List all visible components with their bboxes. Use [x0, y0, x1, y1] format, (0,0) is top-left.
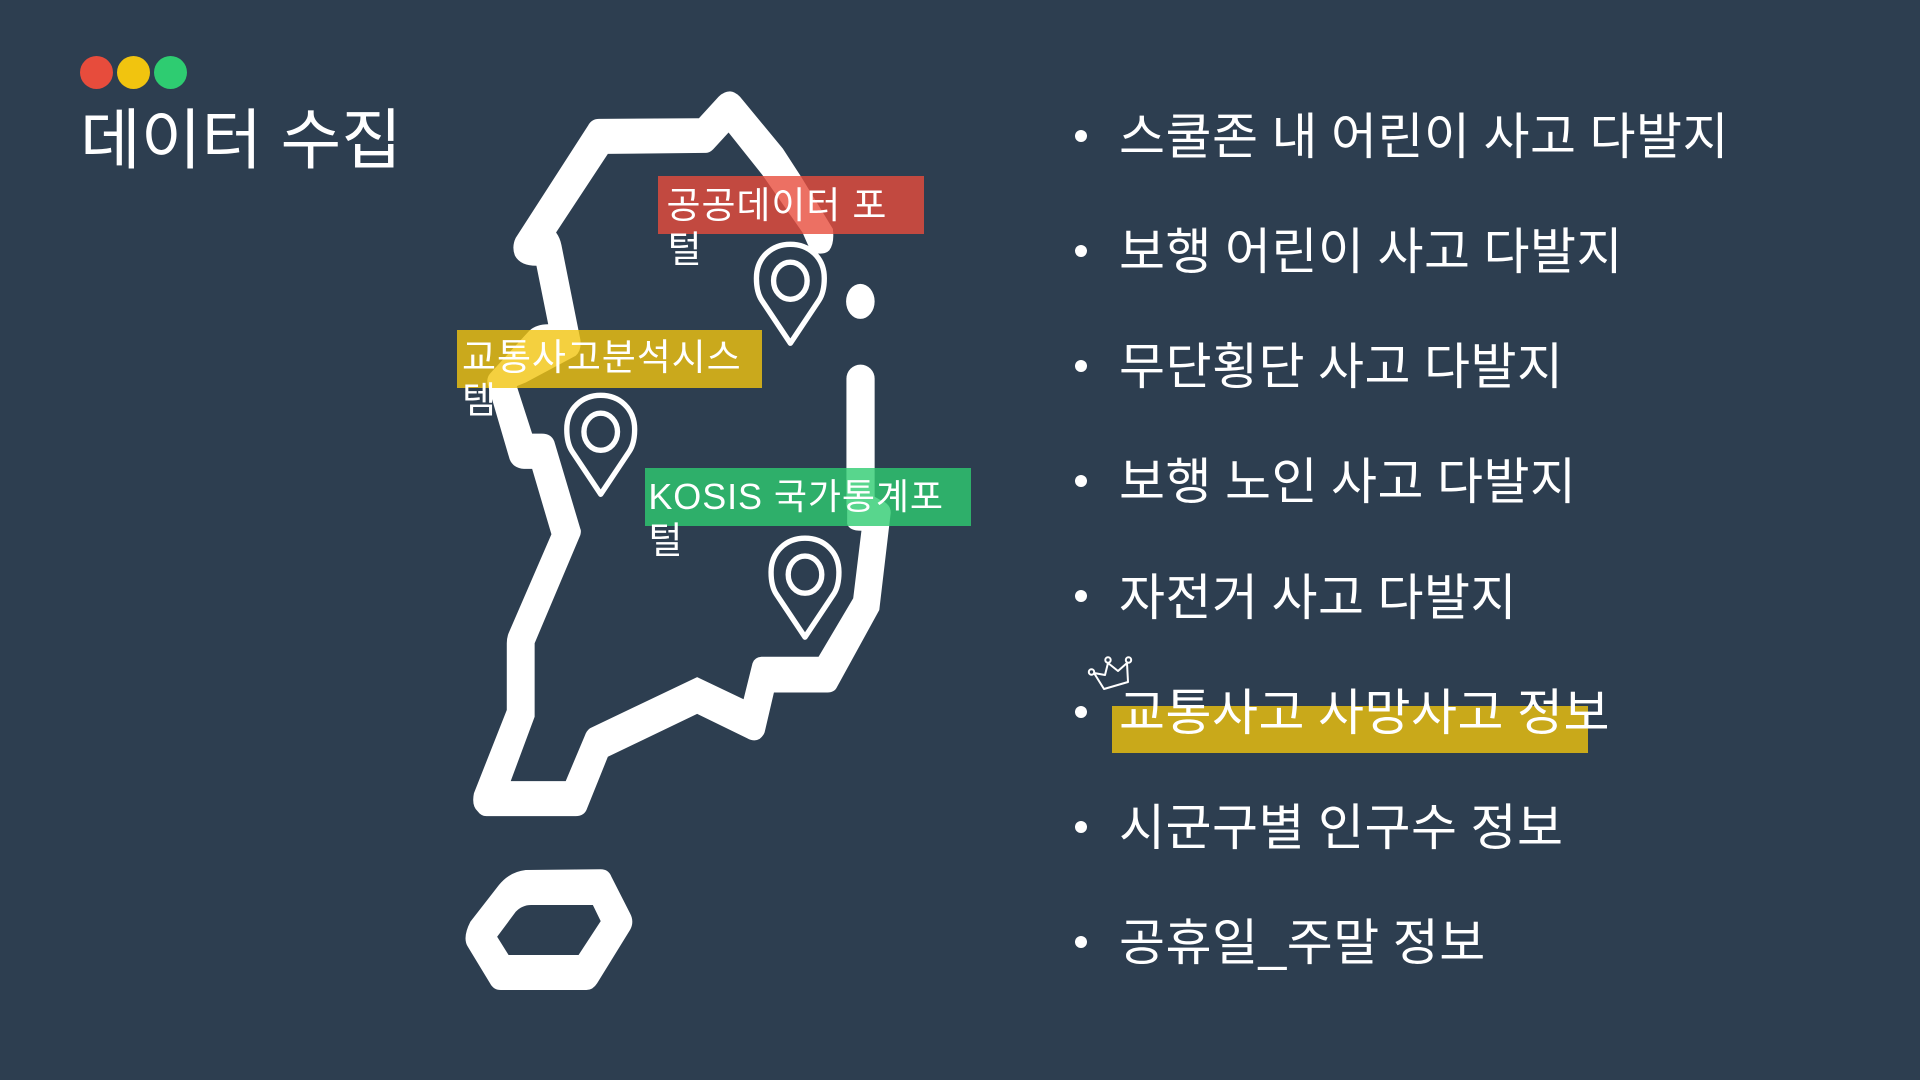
- bulleted list: [1075, 109, 1729, 971]
- bullet 6: [1075, 706, 1087, 718]
- icon: crown: [1088, 656, 1132, 690]
- bullet 3: [1075, 360, 1087, 372]
- highlight behind list item: [1112, 706, 1588, 753]
- label wrap text: 템: [462, 380, 497, 421]
- list item 7: 시군구별 인구수 정보: [1119, 800, 1563, 856]
- label wrap text: 털: [668, 228, 702, 270]
- bullet 7: [1075, 821, 1087, 833]
- green dot: [154, 56, 187, 89]
- pin: KOSIS: [771, 538, 839, 637]
- Jeju island: [466, 869, 632, 990]
- yellow box: [457, 330, 762, 388]
- list item 3: 무단횡단 사고 다발지: [1119, 339, 1563, 395]
- east coast segment: [846, 365, 875, 518]
- label: public data portal: [658, 176, 924, 270]
- list item 8: 공휴일_주말 정보: [1119, 915, 1486, 971]
- bullet 1: [1075, 130, 1087, 142]
- bullet 2: [1075, 245, 1087, 257]
- label text: KOSIS 국가통계포: [648, 476, 944, 517]
- list item 5: 자전거 사고 다발지: [1119, 570, 1517, 626]
- pin: public data portal: [756, 244, 824, 343]
- label text: 교통사고분석시스: [462, 337, 742, 378]
- bullet 4: [1075, 475, 1087, 487]
- title: 데이터 수집: [80, 103, 402, 177]
- pin: traffic accident system: [567, 395, 635, 494]
- green box: [645, 468, 971, 526]
- label: KOSIS: [645, 468, 971, 561]
- red box: [658, 176, 924, 234]
- list item 2: 보행 어린이 사고 다발지: [1119, 224, 1623, 280]
- bullet 5: [1075, 590, 1087, 602]
- label text: 공공데이터 포: [666, 185, 887, 226]
- label: traffic accident analysis system: [457, 330, 762, 421]
- list item 6: 교통사고 사망사고 정보: [1119, 685, 1610, 741]
- mainland outline: [473, 91, 891, 816]
- bullet 8: [1075, 936, 1087, 948]
- window dots: [80, 56, 187, 89]
- list item 1: 스쿨존 내 어린이 사고 다발지: [1119, 109, 1729, 165]
- list item 4: 보행 노인 사고 다발지: [1119, 454, 1576, 510]
- yellow dot: [117, 56, 150, 89]
- red dot: [80, 56, 113, 89]
- label wrap text: 털: [648, 520, 683, 561]
- Ulleungdo island: [846, 284, 875, 319]
